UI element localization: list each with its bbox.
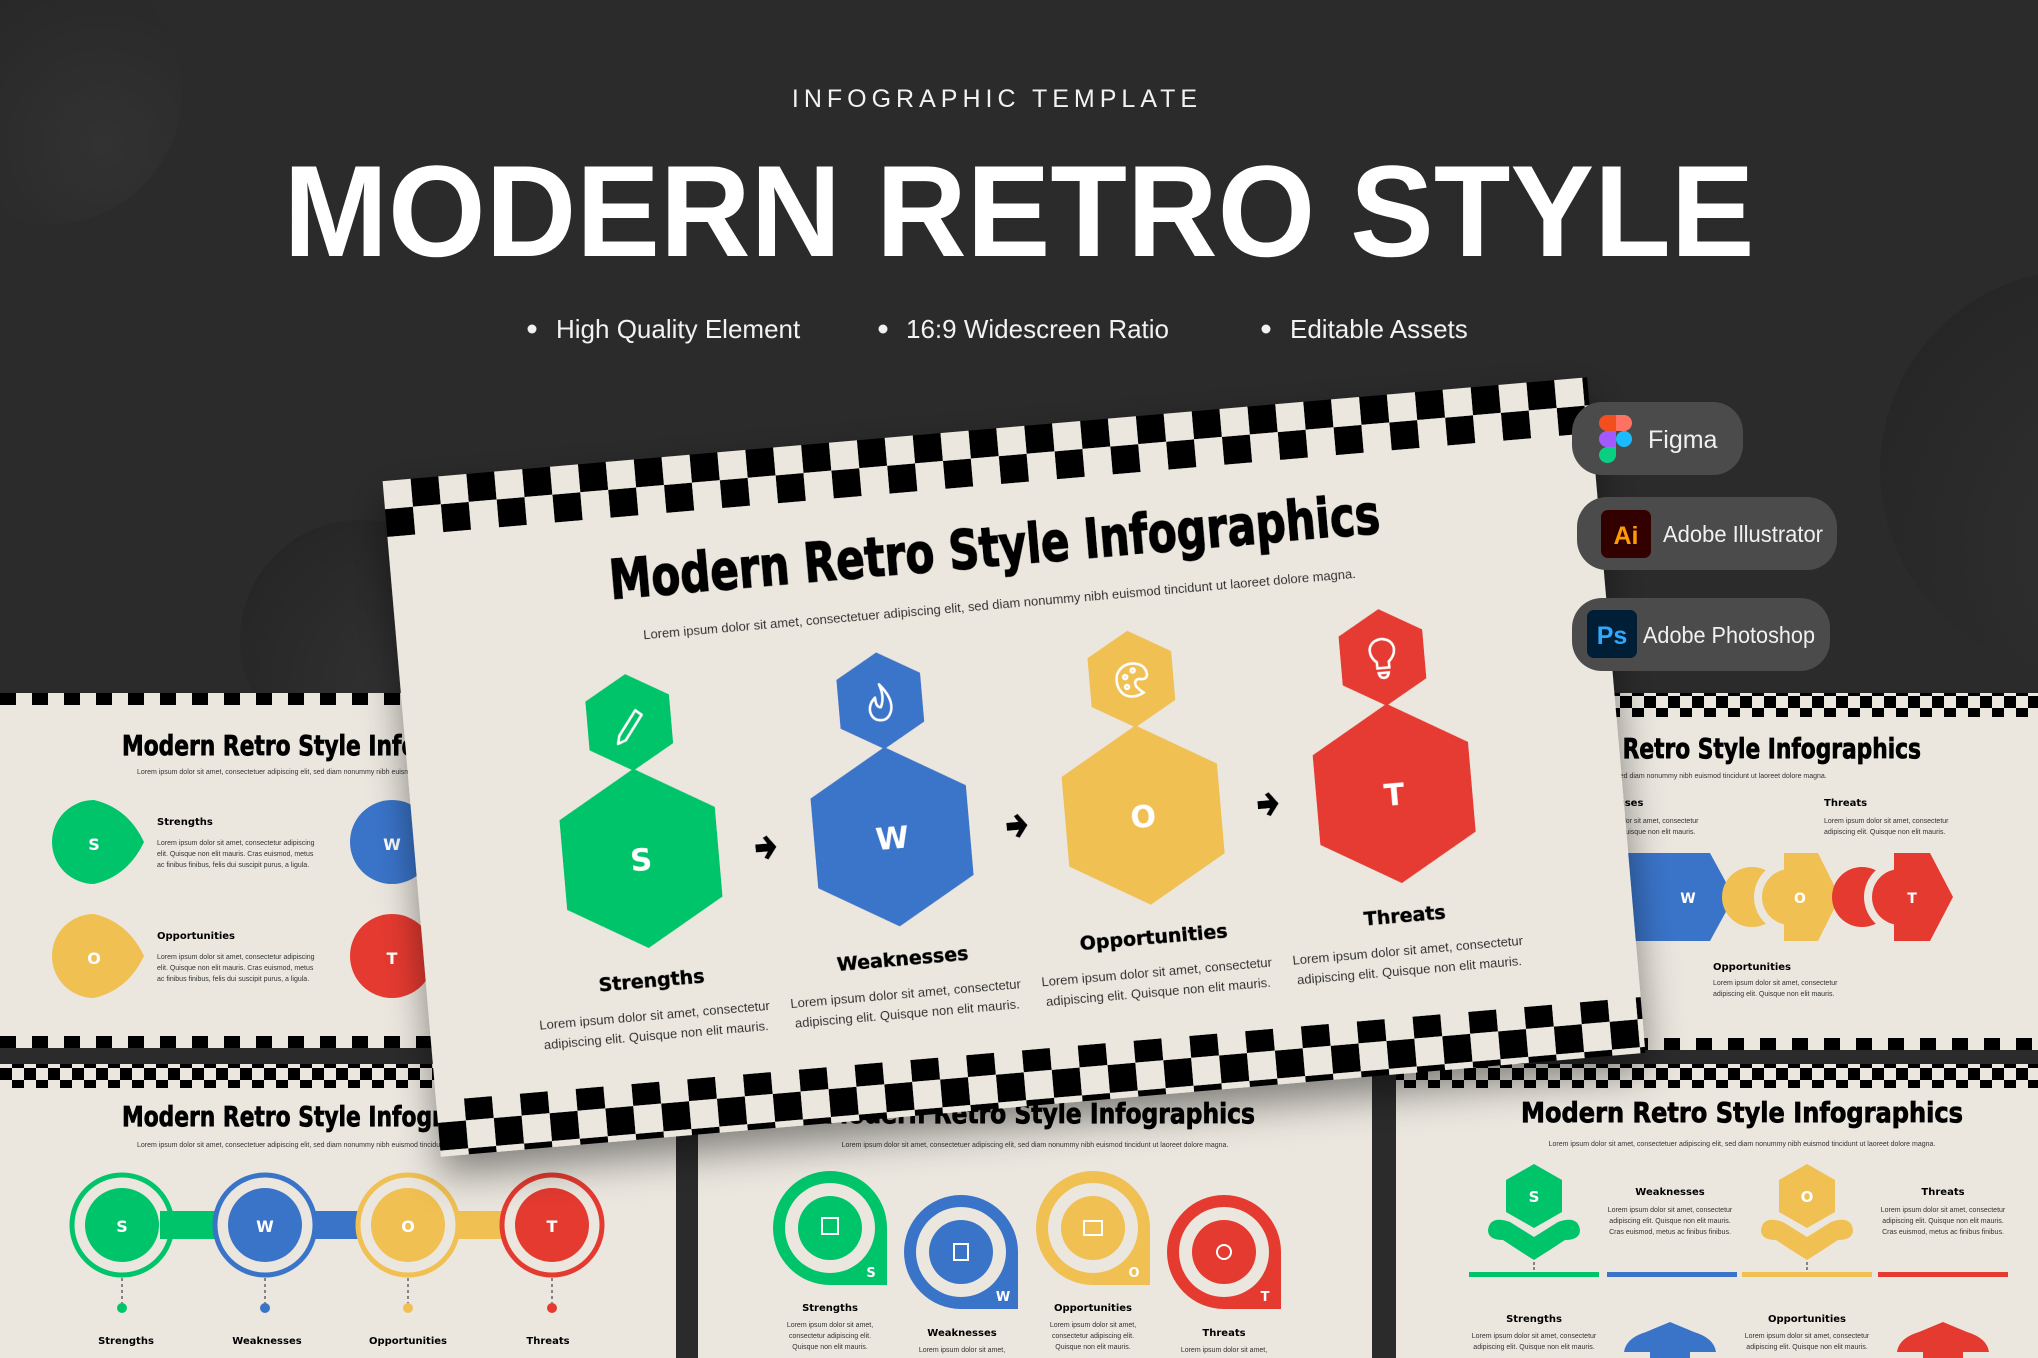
panel: right top slide: W xyxy=(1680,891,1696,907)
panel: middle bottom slide: consectetur adipiscing elit. xyxy=(1052,1333,1134,1340)
panel: right bottom slide: Weaknesses xyxy=(1635,1187,1705,1198)
decorative circle left middle xyxy=(240,520,480,760)
panel: middle bottom slide xyxy=(698,1064,1372,1358)
panel: middle bottom slide: Opportunities xyxy=(1054,1303,1132,1314)
panel: right bottom slide: Threats xyxy=(1921,1187,1965,1198)
panel: right bottom slide xyxy=(1396,1064,2038,1358)
panel: left bottom slide xyxy=(0,1064,676,1358)
panel: middle bottom slide: S xyxy=(866,1266,876,1281)
panel: middle bottom slide: W xyxy=(996,1290,1010,1305)
panel: right bottom slide: Cras euismod, metus ac finibus finibus. xyxy=(1882,1229,2004,1236)
badge: adobe photoshop xyxy=(1572,598,1830,671)
badge: figma xyxy=(1572,402,1743,475)
feature bullets: Editable Assets xyxy=(1290,314,1468,344)
hexagon: strengths: S xyxy=(629,843,653,879)
arrows xyxy=(755,791,1280,860)
slide title: Modern Retro Style Infographics xyxy=(607,483,1382,612)
panel: middle bottom slide: Lorem ipsum dolor sit amet, xyxy=(1181,1347,1267,1354)
badge: adobe photoshop: Ps xyxy=(1597,622,1627,650)
panel: left bottom slide: W xyxy=(256,1217,274,1236)
panel: right bottom slide: Modern Retro Style Infographics xyxy=(1521,1096,1963,1129)
panel: left top slide: Modern Retro Style Infographics xyxy=(122,729,522,762)
panel: right bottom slide: Lorem ipsum dolor sit amet, consectetur xyxy=(1472,1333,1597,1340)
panel: right bottom slide: Lorem ipsum dolor sit amet, consectetuer adipiscing elit, sed diam nonummy nibh euismod tincidunt ut laoreet dolore magna. xyxy=(1549,1141,1935,1148)
panel: left top slide: Opportunities xyxy=(157,931,235,942)
panel: middle bottom slide: Modern Retro Style Infographics xyxy=(825,1097,1255,1130)
panel: right bottom slide: Lorem ipsum dolor sit amet, consectetur xyxy=(1745,1333,1870,1340)
panel: right top slide: Lorem ipsum dolor sit amet, consectetur xyxy=(1824,818,1949,825)
panel: left bottom slide: Weaknesses xyxy=(232,1336,302,1347)
panel: left bottom slide: Threats xyxy=(526,1336,570,1347)
body texts: Lorem ipsum dolor sit amet, consectetur xyxy=(790,976,1022,1011)
labels xyxy=(598,901,1447,996)
body texts: adipiscing elit. Quisque non elit mauris. xyxy=(543,1018,769,1052)
body texts: Lorem ipsum dolor sit amet, consectetur xyxy=(539,998,771,1033)
panel: middle bottom slide: Weaknesses xyxy=(927,1328,997,1339)
panel: right top slide: O xyxy=(1794,891,1806,907)
hexagon: weaknesses: W xyxy=(874,820,910,858)
panel: middle bottom slide: Lorem ipsum dolor sit amet, xyxy=(919,1347,1005,1354)
panel: left top slide: Strengths xyxy=(157,817,213,828)
panel: right top slide: Lorem ipsum dolor sit amet, consectetur xyxy=(1574,818,1699,825)
panel: middle bottom slide: O xyxy=(1128,1266,1140,1281)
panel: left top slide: ac finibus finibus, felis dui suscipit purus, a ligula. xyxy=(157,862,309,869)
body texts: Lorem ipsum dolor sit amet, consectetur xyxy=(1292,933,1524,968)
panel: left bottom slide: S xyxy=(116,1217,128,1236)
body texts: adipiscing elit. Quisque non elit mauris. xyxy=(794,996,1020,1031)
panel: left bottom slide: Opportunities xyxy=(369,1336,447,1347)
panel: middle bottom slide: Lorem ipsum dolor sit amet, xyxy=(787,1322,873,1329)
panel: left bottom slide: O xyxy=(401,1217,415,1236)
panel: right bottom slide: S xyxy=(1529,1188,1539,1206)
badge: adobe illustrator: Adobe Illustrator xyxy=(1663,521,1823,547)
panel: left top slide: elit. Quisque non elit mauris. Cras euismod, metus xyxy=(157,851,314,858)
header kicker: INFOGRAPHIC TEMPLATE xyxy=(792,85,1202,113)
panel: left bottom slide: Lorem ipsum dolor sit amet, consectetuer adipiscing elit, sed diam nonummy nibh euismod tincidunt ut laoreet dolore magna. xyxy=(137,1142,524,1149)
panel: right bottom slide: Lorem ipsum dolor sit amet, consectetur xyxy=(1608,1207,1733,1214)
panel: right bottom slide: Cras euismod, metus ac finibus finibus. xyxy=(1609,1229,1731,1236)
panel: left top slide: S xyxy=(88,835,100,854)
panel: left top slide: Lorem ipsum dolor sit amet, consectetur adipiscing xyxy=(157,954,315,961)
panel: left bottom slide: Modern Retro Style Infographics xyxy=(122,1100,522,1133)
labels: Threats xyxy=(1363,901,1447,930)
panel: middle bottom slide: Quisque non elit mauris. xyxy=(792,1344,868,1351)
panel: right top slide: Opportunities xyxy=(1713,962,1791,973)
hexagon: opportunities: O xyxy=(1129,799,1158,836)
decorative circle right xyxy=(1880,270,2038,670)
labels: Weaknesses xyxy=(836,943,969,976)
body texts: adipiscing elit. Quisque non elit mauris. xyxy=(1296,953,1522,987)
panel: right bottom slide: Strengths xyxy=(1506,1314,1562,1325)
panel: right top slide: T xyxy=(1907,891,1917,907)
panel: right top slide: adipiscing elit. Quisque non elit mauris. xyxy=(1574,829,1695,836)
feature bullets: 16:9 Widescreen Ratio xyxy=(906,314,1169,344)
badge: adobe photoshop: Adobe Photoshop xyxy=(1643,622,1815,648)
panel: left bottom slide: Strengths xyxy=(98,1336,154,1347)
panel: left bottom slide: T xyxy=(547,1217,558,1236)
body texts: Lorem ipsum dolor sit amet, consectetur xyxy=(1041,955,1273,989)
hexagon: weaknesses xyxy=(798,646,977,933)
panel: left top slide: ac finibus finibus, felis dui suscipit purus, a ligula. xyxy=(157,976,309,983)
panel: left top slide: Lorem ipsum dolor sit amet, consectetuer adipiscing elit, sed diam nonummy nibh euismod tincidunt ut laoreet dolore magna. xyxy=(137,769,524,776)
feature bullets xyxy=(528,314,1468,344)
body texts xyxy=(539,933,1526,1053)
panel: right top slide xyxy=(1440,693,2038,1050)
body texts: adipiscing elit. Quisque non elit mauris. xyxy=(1045,975,1271,1009)
hexagon: threats xyxy=(1301,602,1480,890)
labels: Opportunities xyxy=(1079,920,1228,955)
panel: right bottom slide: adipiscing elit. Quisque non elit mauris. xyxy=(1473,1344,1595,1351)
panel: middle bottom slide: Quisque non elit mauris. xyxy=(1055,1344,1131,1351)
hexagon: threats: T xyxy=(1383,778,1407,814)
panel: middle bottom slide: consectetur adipiscing elit. xyxy=(789,1333,871,1340)
panel: middle bottom slide: Strengths xyxy=(802,1303,858,1314)
panel: main tilted slide xyxy=(383,377,1645,1157)
panel: right top slide: Weaknesses xyxy=(1574,798,1643,809)
panel: right top slide: adipiscing elit. Quisque non elit mauris. xyxy=(1713,991,1834,998)
hexagon: strengths xyxy=(547,667,726,955)
feature bullets: High Quality Element xyxy=(556,314,801,344)
slide subtitle: Lorem ipsum dolor sit amet, consectetuer adipiscing elit, sed diam nonummy nibh euismod tincidunt ut laoreet dolore magna. xyxy=(643,566,1356,642)
panel: right top slide: Lorem ipsum dolor sit amet, consectetur xyxy=(1713,980,1838,987)
panel: right bottom slide: adipiscing elit. Quisque non elit mauris. xyxy=(1746,1344,1868,1351)
panel: left top slide: elit. Quisque non elit mauris. Cras euismod, metus xyxy=(157,965,314,972)
panel: middle bottom slide: T xyxy=(1261,1290,1270,1305)
panel: right bottom slide: Opportunities xyxy=(1768,1314,1846,1325)
badge: adobe illustrator xyxy=(1577,497,1837,570)
panel: right bottom slide: Lorem ipsum dolor sit amet, consectetur xyxy=(1881,1207,2006,1214)
main title: MODERN RETRO STYLE xyxy=(284,138,1754,284)
panel: right bottom slide: adipiscing elit. Quisque non elit mauris. xyxy=(1609,1218,1731,1225)
panel: left top slide: W xyxy=(383,835,401,854)
hexagon: opportunities xyxy=(1049,624,1229,911)
panel: middle bottom slide: Lorem ipsum dolor sit amet, xyxy=(1050,1322,1136,1329)
panel: middle bottom slide: Threats xyxy=(1202,1328,1246,1339)
decorative circle top-left xyxy=(0,0,182,224)
panel: right bottom slide: adipiscing elit. Quisque non elit mauris. xyxy=(1882,1218,2004,1225)
panel: left top slide: O xyxy=(87,949,101,968)
panel: right top slide: Threats xyxy=(1824,798,1867,809)
panel: left top slide xyxy=(0,693,560,1048)
panel: right top slide: adipiscing elit. Quisque non elit mauris. xyxy=(1824,829,1945,836)
panel: left top slide: T xyxy=(387,949,398,968)
panel: right bottom slide: O xyxy=(1801,1188,1813,1206)
labels: Strengths xyxy=(598,965,705,996)
badge: adobe illustrator: Ai xyxy=(1614,522,1638,550)
badge: figma: Figma xyxy=(1648,426,1718,454)
panel: left top slide: Lorem ipsum dolor sit amet, consectetur adipiscing xyxy=(157,840,315,847)
panel: middle bottom slide: Lorem ipsum dolor sit amet, consectetuer adipiscing elit, sed diam nonummy nibh euismod tincidunt ut laoreet dolore magna. xyxy=(842,1142,1228,1149)
panel: right top slide: Lorem ipsum dolor sit amet, consectetuer adipiscing elit, sed diam nonummy nibh euismod tincidunt ut laoreet dolore magna. xyxy=(1440,773,1827,780)
panel: right top slide: Modern Retro Style Infographics xyxy=(1522,732,1921,765)
